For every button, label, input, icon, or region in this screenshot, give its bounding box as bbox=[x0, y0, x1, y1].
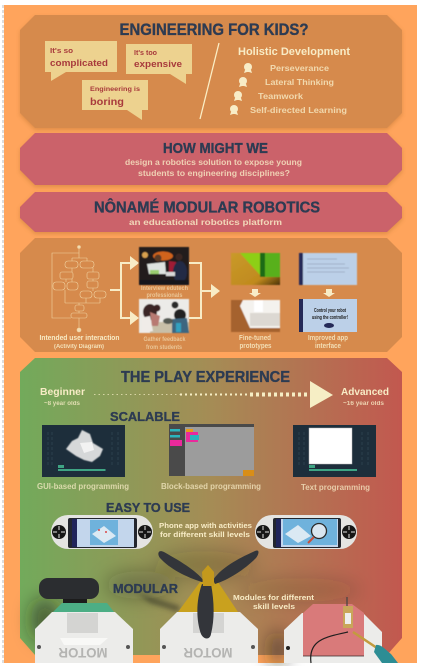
label: beginner bbox=[40, 386, 85, 407]
text: modules: Modules for different bbox=[233, 593, 315, 602]
text: how might we description: design a robotics solution to expose young bbox=[125, 157, 302, 167]
module: motor with propeller: MOTOR bbox=[184, 645, 232, 661]
caption: gather feedback: Gather feedback bbox=[144, 336, 186, 343]
speech bubble: expensive: expensive bbox=[134, 59, 182, 70]
arrow: prototype down bbox=[249, 289, 261, 297]
caption: gui programming: GUI-based programming bbox=[37, 482, 129, 491]
screen: gui programming bbox=[42, 425, 125, 477]
speech bubble: boring: boring bbox=[90, 96, 124, 108]
caption: intended user interaction: Intended user interaction bbox=[40, 333, 120, 342]
text: lateral thinking: Lateral Thinking bbox=[265, 77, 334, 87]
divider slash bbox=[200, 43, 219, 119]
text: platform description: an educational robotics platform bbox=[129, 217, 282, 227]
photo: fine-tuned prototype bbox=[231, 300, 280, 332]
panel: how might we bbox=[20, 133, 402, 187]
arrow: branch to research bbox=[110, 256, 139, 325]
panel: design process bbox=[20, 238, 402, 352]
activity diagram bbox=[52, 246, 106, 332]
heading: engineering for kids: ENGINEERING FOR KIDS? bbox=[120, 21, 308, 39]
text: perseverance: Perseverance bbox=[270, 63, 329, 73]
module: sensor with circuit board bbox=[284, 597, 398, 663]
speech bubble: complicated: It's so bbox=[50, 46, 73, 55]
speech bubble: complicated: complicated bbox=[50, 58, 108, 69]
controller: beginner app bbox=[51, 515, 153, 549]
panel: the play experience bbox=[20, 358, 402, 666]
module: motor with propeller bbox=[158, 551, 258, 663]
label: advanced: Advanced bbox=[341, 386, 389, 398]
photo: gather feedback from students bbox=[139, 299, 189, 333]
panel: engineering for kids bbox=[20, 15, 402, 130]
photo: early prototype bbox=[231, 253, 280, 285]
app screen: improved interface: Control your robot bbox=[314, 308, 346, 314]
panel: noname modular robotics bbox=[20, 192, 402, 234]
caption: interview: professionals bbox=[146, 292, 183, 299]
app screen: improved interface: using the controller! bbox=[312, 315, 348, 321]
speech bubble: complicated bbox=[45, 41, 117, 81]
caption: fine-tuned prototypes: Fine-tuned bbox=[239, 333, 271, 342]
text: modules: skill levels bbox=[253, 602, 295, 611]
caption: intended user interaction: (Activity Diagram) bbox=[54, 344, 104, 350]
caption: fine-tuned prototypes bbox=[239, 333, 272, 350]
text: modules bbox=[233, 593, 315, 611]
module: motor with wheel: MOTOR bbox=[58, 645, 108, 661]
caption: interview: Interview edutech bbox=[141, 285, 188, 292]
label: advanced: ~16 year olds bbox=[343, 401, 385, 407]
icon: ribbon perseverance bbox=[244, 63, 252, 73]
caption: gather feedback: from students bbox=[146, 344, 182, 351]
arrow: merge to prototypes bbox=[189, 263, 220, 318]
photo: interview edutech professionals bbox=[139, 247, 189, 285]
arrow: app down bbox=[323, 289, 335, 297]
icon: ribbon teamwork bbox=[234, 91, 242, 101]
screen: block programming bbox=[169, 424, 254, 476]
propeller cast shadow bbox=[137, 593, 180, 612]
caption: improved app interface: interface bbox=[315, 341, 341, 350]
label: advanced bbox=[341, 386, 389, 407]
caption: gather feedback bbox=[144, 336, 186, 351]
caption: improved app interface: Improved app bbox=[308, 333, 348, 342]
text: teamwork: Teamwork bbox=[258, 91, 303, 101]
speech bubble: expensive bbox=[126, 44, 192, 84]
module shadows bbox=[31, 551, 360, 666]
controller: advanced app bbox=[255, 515, 357, 549]
caption: improved app interface bbox=[308, 333, 348, 350]
heading: easy to use: EASY TO USE bbox=[106, 500, 190, 515]
icon: ribbon lateral thinking bbox=[239, 77, 247, 87]
text: phone app: Phone app with activities bbox=[159, 521, 252, 530]
speech bubble: boring: Engineering is bbox=[90, 86, 140, 93]
heading: scalable: SCALABLE bbox=[110, 409, 180, 424]
text: phone app bbox=[159, 521, 252, 539]
text: self-directed learning: Self-directed Learning bbox=[250, 105, 347, 115]
icon: ribbon self-directed bbox=[230, 105, 238, 115]
text: how might we description: students to engineering disciplines? bbox=[138, 168, 290, 178]
caption: interview bbox=[141, 285, 188, 299]
caption: text programming: Text programming bbox=[301, 483, 370, 492]
icon: propeller bbox=[158, 551, 258, 638]
heading: modular: MODULAR bbox=[113, 581, 179, 596]
heading: how might we: HOW MIGHT WE bbox=[163, 140, 268, 157]
label: beginner: Beginner bbox=[40, 386, 85, 398]
heading: holistic development: Holistic Development bbox=[238, 46, 350, 58]
heading: noname modular robotics: NÔNAMÉ MODULAR ROBOTICS bbox=[94, 198, 320, 216]
text: how might we description bbox=[125, 157, 302, 178]
caption: fine-tuned prototypes: prototypes bbox=[240, 341, 272, 350]
caption: intended user interaction bbox=[40, 333, 120, 350]
speech bubble: expensive: It's too bbox=[134, 50, 157, 57]
heading: the play experience: THE PLAY EXPERIENCE bbox=[121, 369, 290, 386]
caption: block programming: Block-based programming bbox=[161, 482, 261, 491]
module: motor with wheel bbox=[35, 578, 133, 663]
arrow: progression bbox=[94, 381, 333, 408]
app screen: improved interface bbox=[299, 299, 357, 332]
screen: text programming bbox=[293, 425, 376, 477]
speech bubble: boring bbox=[82, 80, 148, 120]
app screen: early interface bbox=[299, 253, 357, 285]
text: phone app: for different skill levels bbox=[160, 530, 250, 539]
label: beginner: ~8 year olds bbox=[44, 401, 81, 407]
